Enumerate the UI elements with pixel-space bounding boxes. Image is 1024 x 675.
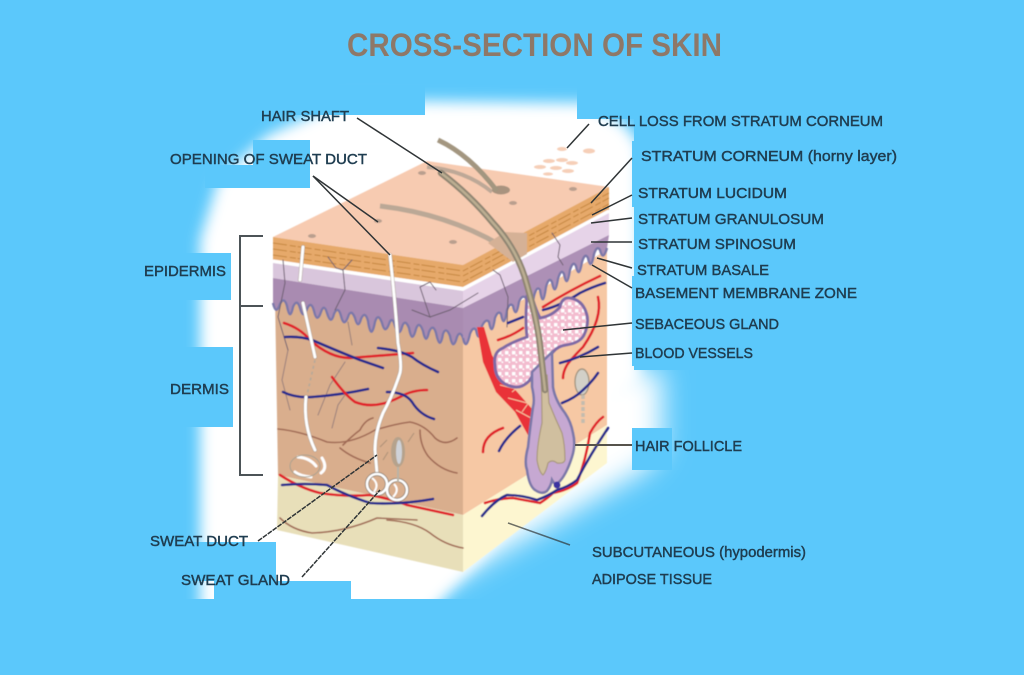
dermis left face xyxy=(275,295,463,515)
skin flakes xyxy=(534,147,595,176)
label: stratum spinosum: STRATUM SPINOSUM xyxy=(638,236,796,253)
label: sweat duct: SWEAT DUCT xyxy=(150,533,248,550)
capillaries in dermis xyxy=(282,322,352,428)
label: stratum corneum: STRATUM CORNEUM (horny layer) xyxy=(641,148,897,165)
bracket: epidermis and dermis xyxy=(240,236,263,475)
skin surface xyxy=(273,161,609,265)
sweat duct, left xyxy=(300,247,315,450)
arrector pili red muscle fan xyxy=(477,327,533,437)
small gland right face xyxy=(575,369,589,423)
hair follicle xyxy=(526,352,574,493)
follicle funnel xyxy=(488,232,527,262)
label: hair shaft: HAIR SHAFT xyxy=(261,108,349,125)
epidermal capillaries xyxy=(278,233,563,350)
label: subcutaneous: SUBCUTANEOUS (hypodermis) xyxy=(592,544,806,561)
label: sebaceous gland: SEBACEOUS GLAND xyxy=(635,316,779,333)
bottom vessels xyxy=(482,417,608,516)
skin cross-section cube xyxy=(273,140,609,572)
dermis blood vessels xyxy=(280,323,453,515)
pores on surface xyxy=(308,171,577,244)
hair shadow under skin, front xyxy=(380,206,500,245)
hair opening xyxy=(492,186,510,194)
white glow behind illustration xyxy=(200,100,640,640)
nerve fibres xyxy=(278,418,463,548)
hair shaft xyxy=(441,173,545,390)
sebaceous gland xyxy=(495,297,588,387)
basal wave right xyxy=(463,248,607,344)
blood vessels right face xyxy=(483,276,605,452)
stratum corneum left xyxy=(273,237,463,287)
white glow, lower right diagonal xyxy=(300,370,662,640)
hair shadow under skin, back xyxy=(427,167,492,192)
stratum corneum right xyxy=(463,187,609,287)
emerging hair xyxy=(438,140,497,191)
corneum striations xyxy=(273,193,609,282)
sweat gland coil, main xyxy=(367,474,407,500)
label: dermis: DERMIS xyxy=(170,381,229,398)
label: hair follicle: HAIR FOLLICLE xyxy=(635,438,742,455)
label: blood vessels: BLOOD VESSELS xyxy=(635,345,753,362)
label: stratum basale: STRATUM BASALE xyxy=(637,262,769,279)
dermis right face xyxy=(463,250,607,515)
leader lines xyxy=(258,118,632,577)
stratum spinosum left xyxy=(273,278,463,344)
label: sweat gland: SWEAT GLAND xyxy=(181,572,290,589)
label: basement membrane zone: BASEMENT MEMBRANE ZONE xyxy=(635,285,857,302)
stratum granulosum right xyxy=(463,213,609,308)
label: cell loss: CELL LOSS FROM STRATUM CORNEUM xyxy=(598,113,883,130)
stratum spinosum right xyxy=(463,235,609,344)
hypodermis right face xyxy=(463,425,607,572)
follicle hair bulb xyxy=(537,375,565,475)
label: stratum lucidum: STRATUM LUCIDUM xyxy=(638,185,787,202)
label: stratum granulosum: STRATUM GRANULOSUM xyxy=(638,211,824,228)
label: opening of sweat duct: OPENING OF SWEAT DUCT xyxy=(170,151,367,168)
hypodermis left face xyxy=(277,475,463,572)
stratum lucidum stripe xyxy=(273,211,609,289)
title: CROSS-SECTION OF SKIN xyxy=(347,27,722,63)
stratum granulosum left xyxy=(273,263,463,308)
label: epidermis: EPIDERMIS xyxy=(144,263,226,280)
basal wave left xyxy=(273,300,463,344)
sweat gland coil, left xyxy=(290,455,325,477)
sweat duct, main xyxy=(375,255,401,473)
label: adipose tissue: ADIPOSE TISSUE xyxy=(592,571,712,588)
small apocrine gland, left xyxy=(380,433,414,482)
